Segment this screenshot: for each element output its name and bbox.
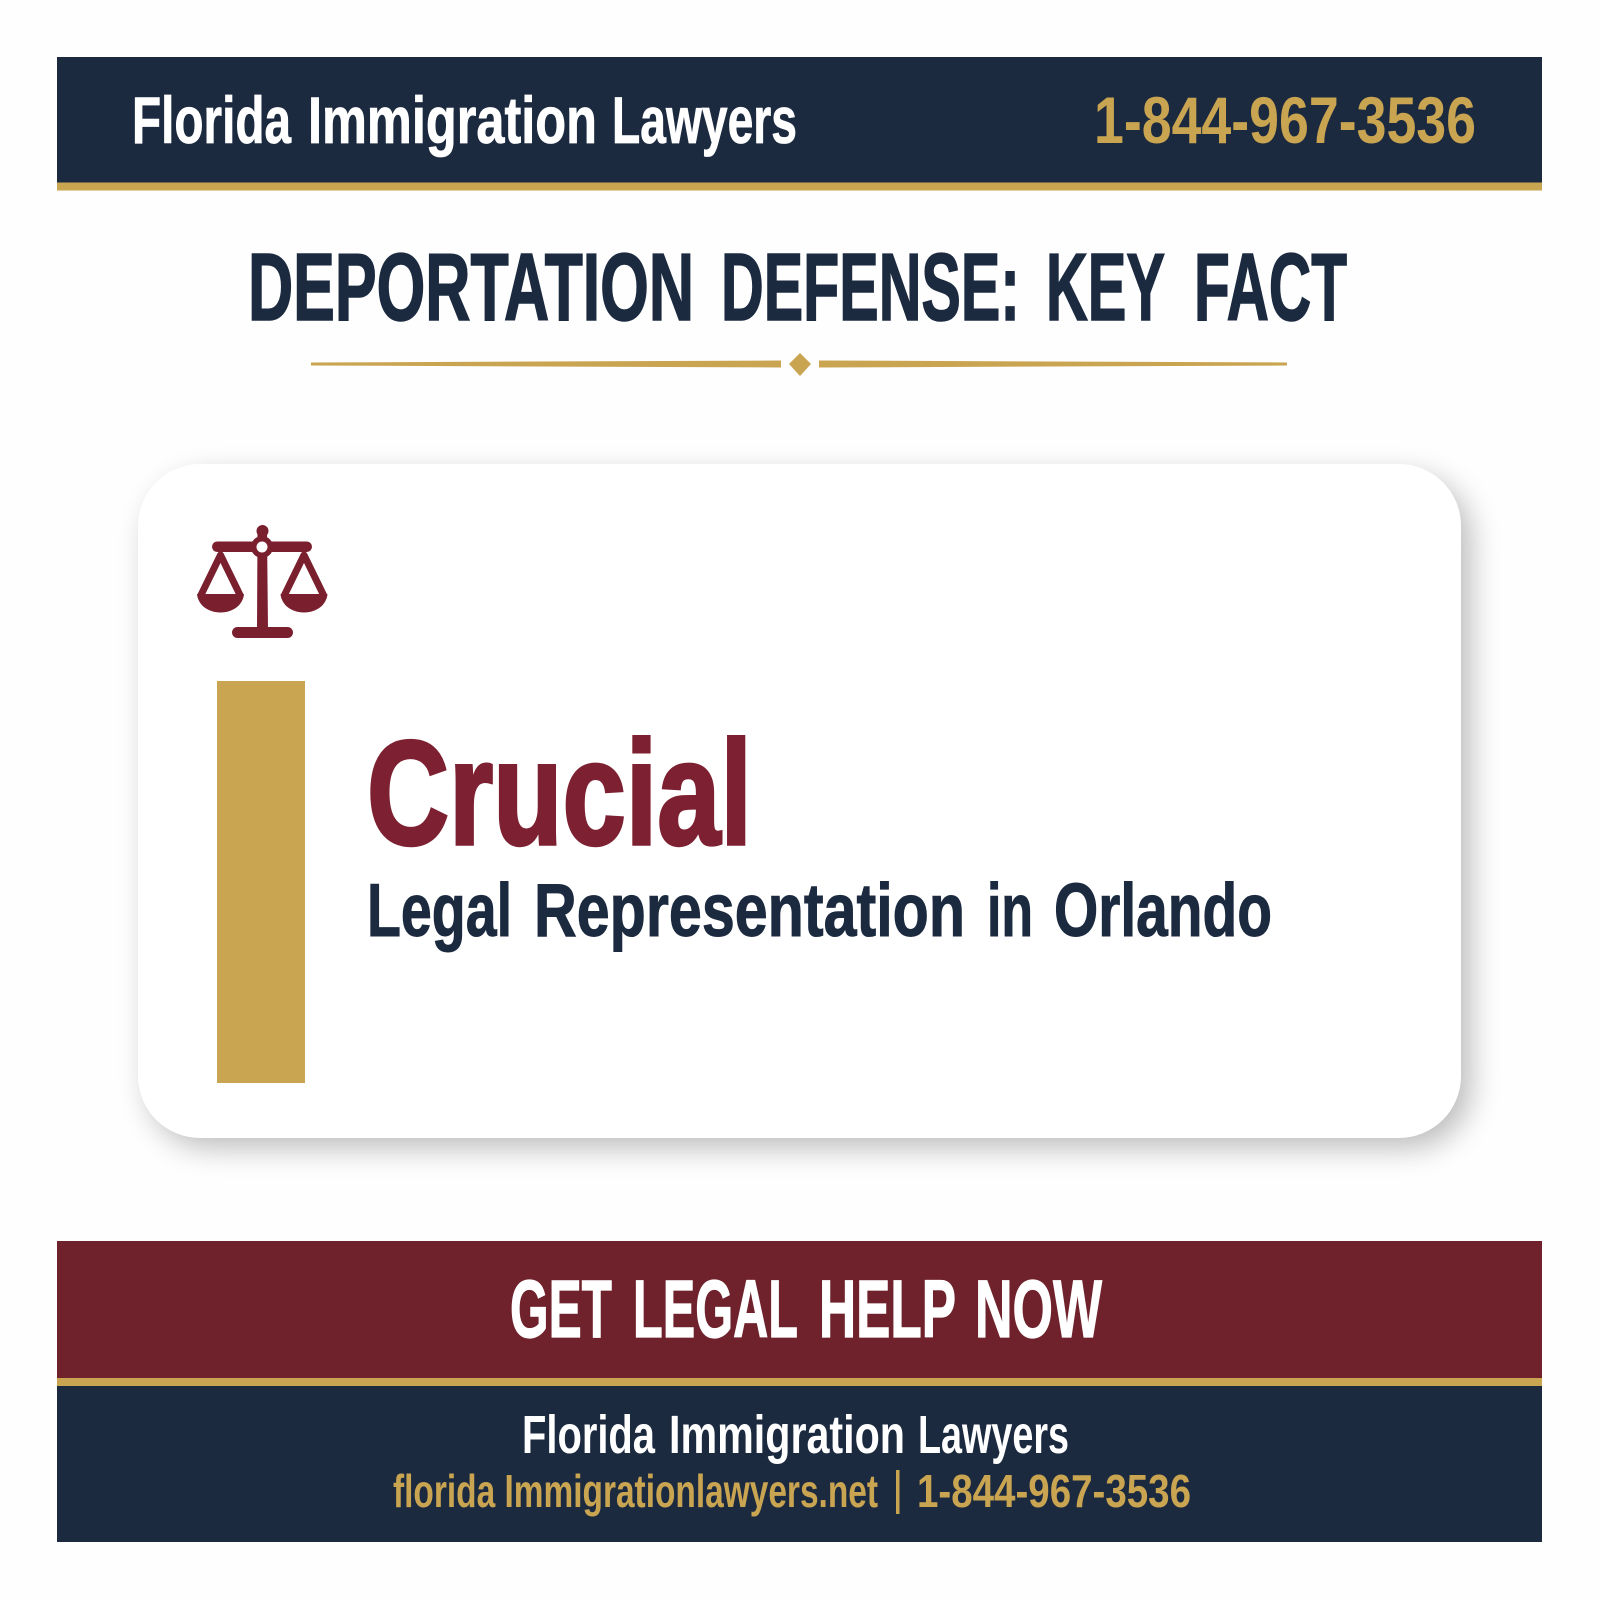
footer website: florida Immigrationlawyers.net (393, 1465, 878, 1517)
call to action text: HELP (819, 1264, 956, 1355)
footer firm name (522, 1405, 1069, 1465)
footer band (57, 1386, 1542, 1542)
subheading: Orlando (1054, 868, 1272, 952)
headline word: Crucial (367, 711, 752, 876)
phone number: 1-844-967-3536 (1094, 83, 1476, 157)
title (248, 234, 1347, 341)
footer phone: 1-844-967-3536 (917, 1465, 1191, 1517)
top header band (57, 57, 1542, 190)
title: DEFENSE: (721, 234, 1020, 341)
firm name: Immigration (308, 83, 597, 157)
firm name: Florida (132, 83, 292, 157)
subheading (367, 868, 1272, 952)
firm name: Lawyers (612, 83, 797, 157)
title divider with diamond (311, 353, 1287, 376)
footer firm name: Lawyers (918, 1405, 1069, 1465)
call to action text: GET (510, 1264, 612, 1355)
call to action text: LEGAL (633, 1264, 798, 1355)
panel: key fact card (138, 464, 1471, 1148)
gold accent bar (217, 681, 305, 1083)
title: DEPORTATION (248, 234, 694, 341)
footer pipe (896, 1470, 900, 1514)
subheading: Legal (367, 868, 512, 952)
call to action text: NOW (975, 1264, 1102, 1355)
firm name (132, 83, 797, 157)
call to action text (510, 1264, 1102, 1355)
icon: scales of justice (197, 525, 328, 638)
call to action band (57, 1241, 1542, 1379)
footer firm name: Immigration (669, 1405, 905, 1465)
subheading: Representation (534, 868, 965, 952)
title: KEY (1046, 234, 1165, 341)
subheading: in (987, 868, 1033, 952)
title: FACT (1194, 234, 1347, 341)
footer firm name: Florida (522, 1405, 656, 1465)
gold separator (57, 1378, 1542, 1386)
